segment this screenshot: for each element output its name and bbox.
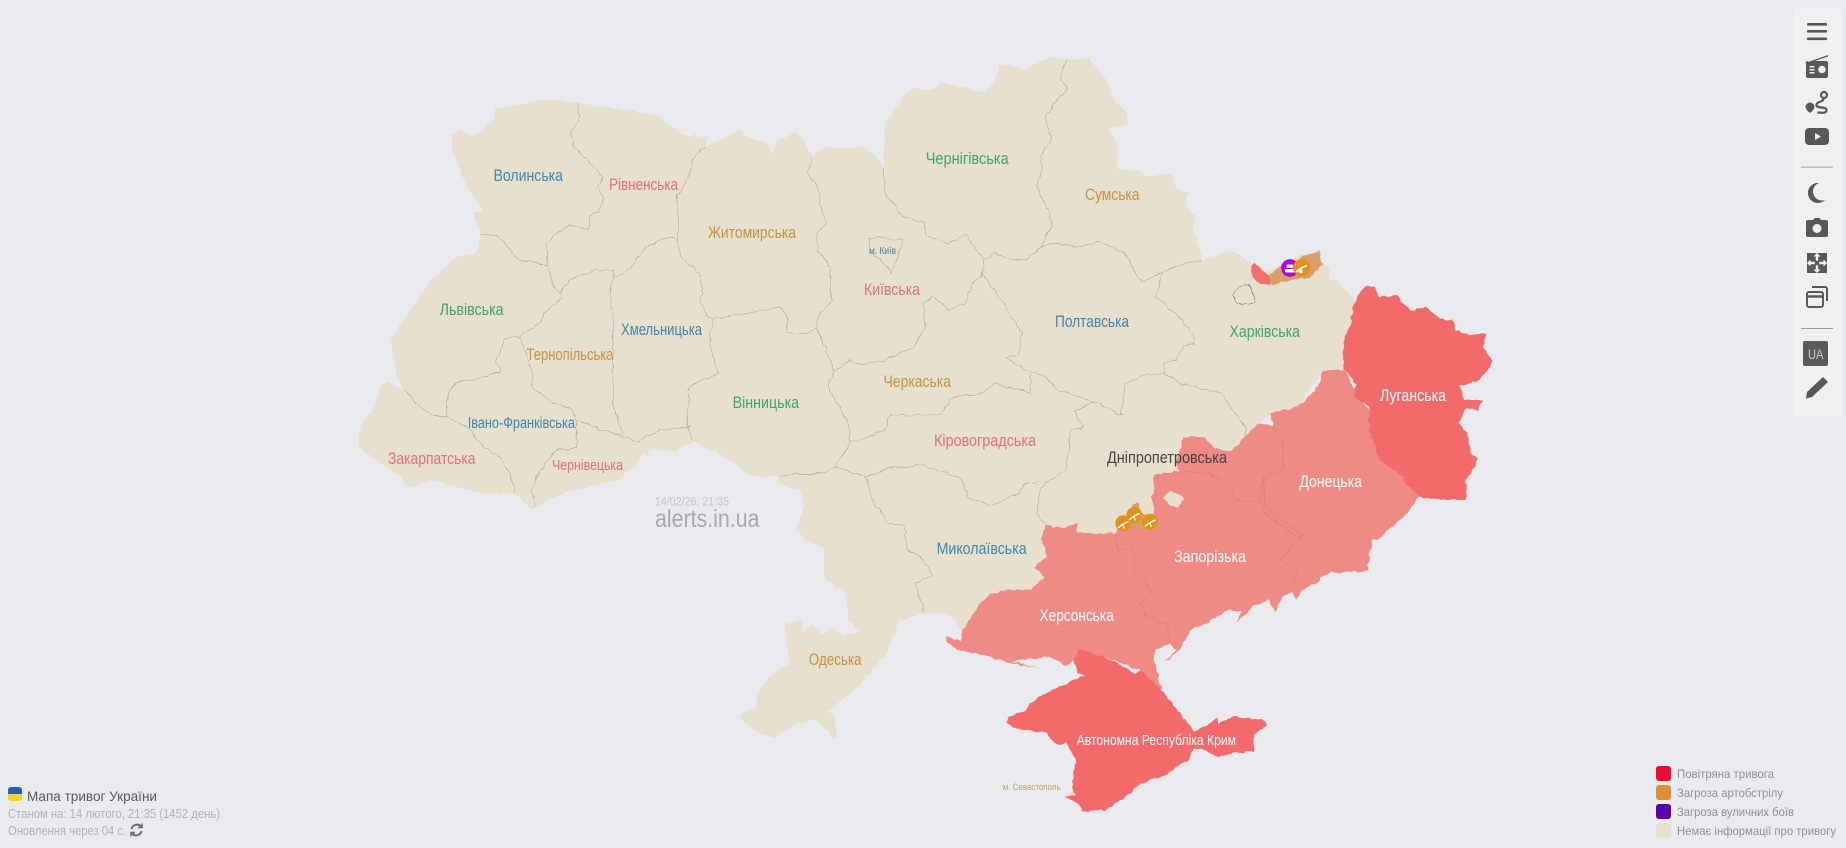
label: Crimea: Автономна Республіка Крим (1077, 732, 1236, 749)
label: Kharkiv: Харківська (1230, 322, 1300, 341)
watermark site name: alerts.in.ua (655, 505, 760, 533)
legend (1656, 766, 1836, 838)
label: Poltava: Полтавська (1055, 312, 1129, 331)
label: Zaporizhzhia: Запорізька (1174, 547, 1246, 566)
label: Rivne: Рівненська (609, 175, 678, 194)
label: Ternopil: Тернопільська (526, 345, 614, 364)
icon: youtube (1805, 128, 1829, 145)
label: Sevastopol: м. Севастополь (1003, 782, 1061, 793)
title: Мапа тривог України (27, 788, 157, 804)
icon: Ukrainian flag (8, 787, 22, 801)
label: Luhansk: Луганська (1380, 386, 1446, 405)
icon: artillery 1 (1115, 515, 1131, 531)
icon: menu (1807, 23, 1827, 40)
toolbar panel (1793, 9, 1842, 417)
icon: camera (1806, 218, 1828, 237)
label: Zakarpattia: Закарпатська (388, 449, 476, 468)
divider (1801, 167, 1833, 168)
language button UA (1803, 341, 1828, 366)
legend item: air alert: Повітряна тривога (1677, 767, 1774, 781)
icon: radio (1806, 55, 1828, 78)
label: Lviv: Львівська (440, 300, 504, 319)
map shapes (358, 57, 1491, 812)
language button UA: UA (1808, 346, 1824, 362)
artillery zone shapes north Kharkiv (1251, 250, 1323, 285)
label: Zhytomyr: Житомирська (708, 223, 796, 242)
icon: windows (1807, 287, 1827, 307)
label: Mykolaiv: Миколаївська (937, 539, 1027, 558)
land: regions without alert (358, 57, 1355, 739)
oblast labels (388, 149, 1446, 793)
status date: Станом на: 14 лютого, 21:35 (1452 день) (8, 807, 220, 821)
icon: artillery 2 (1126, 507, 1142, 523)
label: Chernihiv: Чернігівська (926, 149, 1009, 168)
icon: route (1806, 92, 1827, 113)
legend item: no information: Немає інформації про тривогу (1677, 824, 1836, 838)
status block bottom left (8, 787, 220, 838)
label: Cherkasy: Черкаська (884, 372, 951, 391)
icon: moon (1808, 183, 1825, 203)
label: Donetsk: Донецька (1299, 472, 1362, 491)
label: Odesa: Одеська (809, 650, 862, 669)
icon: refresh (131, 824, 142, 836)
label: Chernivtsi: Чернівецька (552, 458, 624, 474)
artillery zone shape south Dnipropetrovsk (1127, 502, 1162, 530)
label: Vinnytsia: Вінницька (733, 393, 800, 412)
region: Luhansk (1343, 287, 1491, 500)
watermark timestamp: 14/02/26, 21:35 (655, 497, 729, 509)
icon: pencil (1806, 377, 1828, 398)
legend item: street fighting threat: Загроза вуличних боїв (1677, 805, 1794, 819)
internal oblast borders (405, 60, 1304, 643)
label: Kirovohrad: Кіровоградська (934, 431, 1036, 450)
region: Crimea (1006, 648, 1267, 812)
icon: artillery (1293, 259, 1310, 277)
icon: expand (1807, 253, 1827, 273)
update countdown: Оновлення через 04 с. (8, 824, 126, 838)
label: Kyiv city: м. Київ (869, 246, 896, 257)
label: Kyiv oblast: Київська (864, 280, 920, 299)
label: Sumy: Сумська (1085, 185, 1140, 204)
label: Kherson: Херсонська (1040, 606, 1114, 625)
label: Ivano-Frankivsk: Івано-Франківська (468, 415, 575, 432)
icon: artillery 3 (1142, 514, 1158, 530)
threat icons north Kharkiv (1281, 259, 1310, 277)
beige enclave near Zaporizhzhia (1164, 490, 1185, 508)
regions: light red alert (Kherson, Zaporizhzhia, Donetsk, east Dnipropetrovsk) (946, 370, 1420, 690)
map of Ukraine (358, 57, 1491, 812)
label: Khmelnytskyi: Хмельницька (621, 320, 702, 339)
label: Dnipropetrovsk: Дніпропетровська (1107, 448, 1227, 467)
legend item: artillery threat: Загроза артобстрілу (1677, 786, 1783, 800)
label: Volyn: Волинська (494, 166, 563, 185)
threat icons south Dnipropetrovsk (1115, 507, 1158, 531)
icon: street fighting tank (1281, 259, 1299, 277)
divider (1801, 328, 1833, 329)
